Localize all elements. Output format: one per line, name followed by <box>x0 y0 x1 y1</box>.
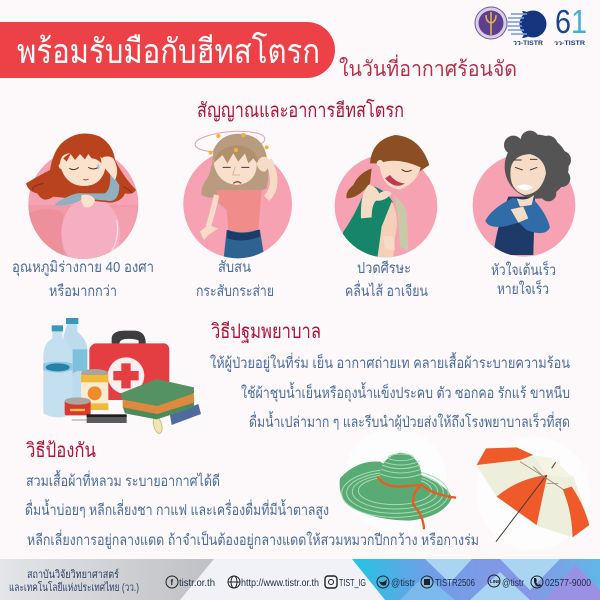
heading: first aid: วิธีปฐมพยาบาล <box>211 321 321 343</box>
panel: symptom 2 confusion <box>183 129 292 300</box>
icon: phone and scissors <box>72 414 127 423</box>
footer: contact icons: LINE <box>490 579 500 584</box>
title banner: พร้อมรับมือกับฮีทสโตรก <box>17 32 320 71</box>
panel: symptom 1 high temperature: หรือมากกว่า <box>49 283 117 300</box>
illustration: first aid supplies <box>43 318 201 434</box>
text: prevention steps: ดื่มน้ำบ่อยๆ หลีกเลี่ยงชา กาแฟ และเครื่องดื่มที่มีน้ำตาลสูง <box>25 499 329 519</box>
label: อุณหภูมิร่างกาย 40 องศา <box>12 259 154 277</box>
panel: symptom 3 headache nausea <box>333 135 437 300</box>
title banner <box>0 22 335 78</box>
panel: symptom 2 confusion: กระสับกระส่าย <box>196 283 274 300</box>
text: first aid steps <box>210 352 570 432</box>
label: ปวดศีรษะ <box>357 260 411 277</box>
footer: organisation name: และเทคโนโลยีแห่งประเทศไทย (วว.) <box>9 580 139 594</box>
footer: organisation name: สถาบันวิจัยวิทยาศาสตร์ <box>27 568 119 581</box>
illustration: dizzy girl <box>183 129 292 262</box>
footer: contact icons: @tistr <box>502 578 525 589</box>
footer: contact icons <box>166 575 591 589</box>
subtitle: ในวันที่อากาศร้อนจัด <box>339 54 517 81</box>
icon: water bottles <box>43 318 87 417</box>
logo: TISTR globe: วว-TISTR <box>513 40 543 47</box>
label: หัวใจเต้นเร็ว <box>491 260 556 279</box>
heading: prevention: วิธีป้องกัน <box>26 440 96 462</box>
label: สับสน <box>218 259 251 276</box>
footer: contact icons: tistr.or.th <box>179 578 215 589</box>
text: prevention steps <box>25 470 479 549</box>
illustration: girl in bed <box>26 133 140 270</box>
illustration: umbrella <box>477 437 590 550</box>
panel: symptom 1 high temperature <box>12 133 154 300</box>
icon: first aid kit <box>89 331 169 400</box>
text: prevention steps: สวมเสื้อผ้าที่หลวม ระบายอากาศได้ดี <box>26 470 220 490</box>
heading: symptoms: สัญญาณและอาการฮีทสโตรก <box>197 99 404 122</box>
illustration: sun hat <box>340 428 456 532</box>
illustration: elderly person chest pain <box>473 131 575 257</box>
footer: contact icons: TISTR2506 <box>435 578 475 589</box>
illustration: vomiting girl <box>333 135 437 258</box>
icon: canned food <box>65 369 108 415</box>
footer: contact icons: 02577-9000 <box>545 578 591 589</box>
footer: contact icons: f <box>170 578 174 587</box>
icon: folded towels <box>121 379 201 434</box>
logos <box>475 3 587 47</box>
logo: institute seal <box>475 7 507 39</box>
footer blue pattern <box>352 559 600 600</box>
footer <box>0 559 600 600</box>
panel: symptom 4 fast heartbeat <box>473 131 575 298</box>
logo: 61 years: วว-TISTR <box>554 40 586 47</box>
footer: contact icons: http://www.tistr.or.th <box>241 578 319 589</box>
footer: contact icons: @tistr <box>391 578 416 589</box>
panel: symptom 3 headache nausea: คลื่นไส้ อาเจียน <box>345 280 428 300</box>
text: prevention steps: หลีกเลี่ยงการอยู่กลางแดด ถ้าจำเป็นต้องอยู่กลางแดดให้สวมหมวกปีกกว้าง หรือกางร่ม <box>27 529 479 549</box>
logo: 61 years: 61 <box>555 3 587 40</box>
panel: symptom 4 fast heartbeat: หายใจเร็ว <box>497 279 549 298</box>
footer: contact icons: TIST_IG <box>339 578 366 589</box>
footer: organisation name <box>9 568 139 594</box>
